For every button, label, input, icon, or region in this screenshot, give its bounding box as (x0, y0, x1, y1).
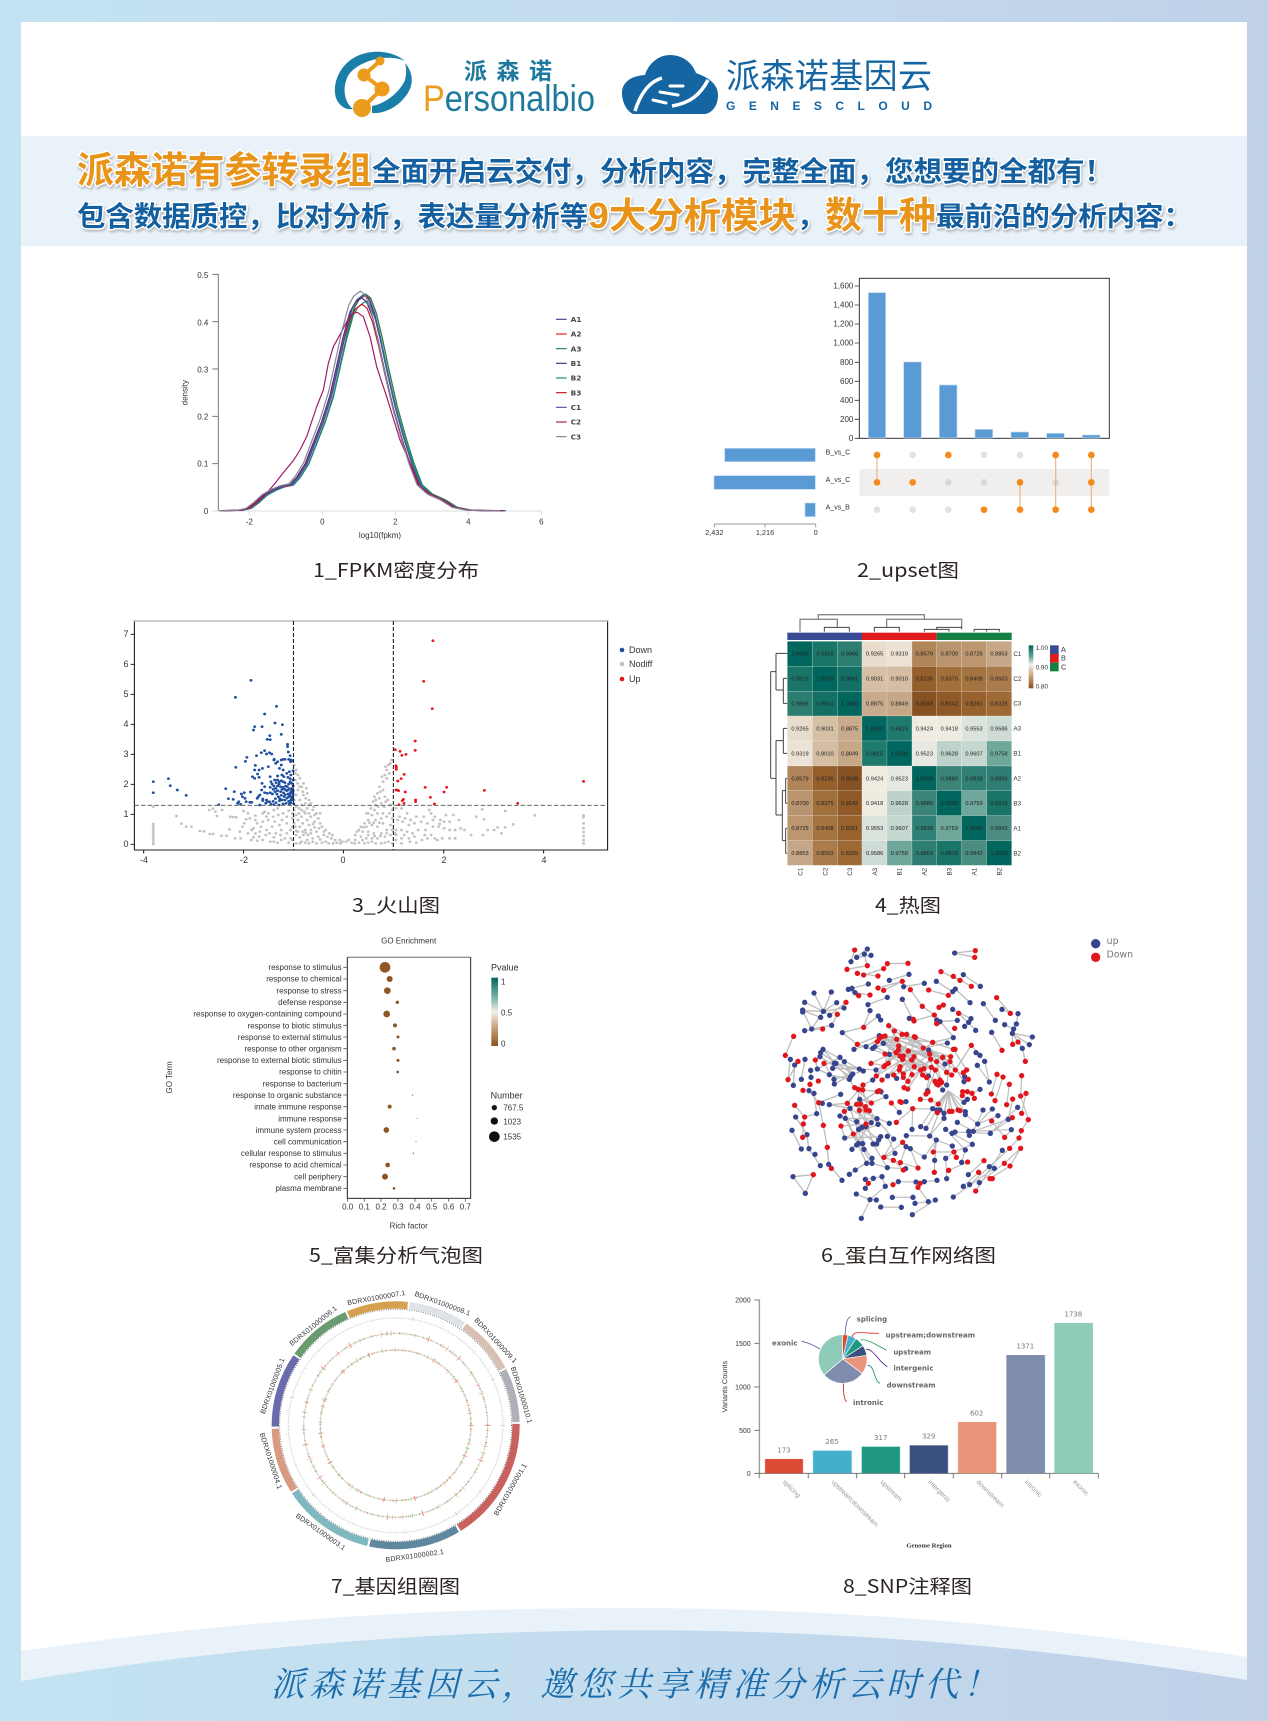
cell values: 0.8142 (941, 701, 958, 707)
chart 1: FPKM density: 0.2 (197, 413, 209, 422)
chart 5: GO enrichment bubble: GO Enrichment (381, 937, 437, 946)
contig labels: BDRX01000008.1 (413, 1291, 471, 1318)
chart 5: GO enrichment bubble: 0.5 (426, 1203, 438, 1212)
caption 4: 4_热图 (875, 891, 941, 918)
cell values: 0.9628 (941, 751, 958, 757)
cell values: 0.9842 (990, 826, 1008, 832)
cell values: 0.8049 (841, 776, 858, 782)
caption 3: 3_火山图 (352, 891, 440, 918)
chart 2: upset plot: 1,000 (833, 339, 854, 348)
cell values: 1.0000 (990, 851, 1008, 857)
cell values: 1.0000 (841, 701, 858, 707)
cell values: 0.9031 (816, 726, 834, 732)
logo: Personalbio (335, 52, 595, 119)
cell values: 0.9607 (965, 751, 983, 757)
chart 5: GO enrichment bubble: 0.0 (342, 1203, 354, 1212)
chart 2: upset plot: 600 (840, 377, 854, 386)
chart 1: FPKM density: log10(fpkm) (359, 531, 401, 540)
chart 1: FPKM density: 0.5 (197, 271, 209, 280)
cell values (791, 652, 1008, 857)
chart 5: GO enrichment bubble: 0.4 (409, 1203, 421, 1212)
GO term labels: response to oxygen-containing compound (193, 1010, 342, 1019)
logo: Personalbio: Personalbio (423, 78, 595, 119)
headline text: 包含数据质控，比对分析，表达量分析等 (77, 201, 588, 232)
footer wave (0, 1608, 1268, 1721)
cell values: 0.9319 (891, 652, 908, 658)
chart 4: heatmap: C3 (847, 867, 854, 876)
cell values: 0.9418 (866, 801, 883, 807)
chart 4: heatmap: C (1061, 662, 1067, 671)
chart 4: heatmap: C1 (797, 867, 804, 876)
legend: C1 (571, 403, 581, 412)
chart 3: volcano plot: 5 (123, 689, 129, 699)
chart 5: GO enrichment bubble: 1 (501, 978, 506, 987)
legend: B1 (571, 359, 581, 368)
chart 2: upset plot: 1,400 (833, 301, 854, 310)
dendrograms (800, 615, 962, 632)
cell values: 0.8261 (841, 826, 858, 832)
chart 3: volcano plot: 2 (441, 855, 447, 865)
chart 8: SNP annotation (720, 1298, 1098, 1550)
cell values: 0.8849 (891, 701, 908, 707)
cell values: 0.9866 (841, 652, 858, 658)
cell values: 0.9553 (965, 726, 983, 732)
chart 5: GO enrichment bubble (165, 937, 524, 1231)
chart 3: volcano plot: Up (629, 674, 641, 684)
chart 4: heatmap: B2 (996, 867, 1003, 876)
down nodes (785, 950, 1028, 1191)
chart 7: genome circos (228, 1258, 563, 1593)
chart 5: GO enrichment bubble: Number (491, 1091, 523, 1101)
chart 4: heatmap: 1.00 (1036, 645, 1048, 652)
chart 4: heatmap: 0.80 (1036, 684, 1048, 691)
cell values: 0.8325 (841, 851, 858, 857)
caption 8: 8_SNP注释图 (843, 1572, 972, 1599)
cell values: 0.8049 (916, 701, 933, 707)
chart 3: volcano plot: 1 (123, 809, 129, 819)
cell values: 0.8849 (841, 751, 858, 757)
cell values: 0.9418 (941, 726, 958, 732)
category labels (781, 1479, 1090, 1529)
chart 5: GO enrichment bubble: Rich factor (390, 1222, 428, 1231)
cell values: 0.8853 (990, 652, 1008, 658)
nodiff points (153, 760, 584, 844)
chart 8: SNP annotation: 0 (747, 1471, 751, 1478)
chart 8: SNP annotation: 500 (739, 1428, 751, 1435)
contig labels: BDRX01000002.1 (385, 1549, 444, 1564)
row and column labels: C3 (1013, 701, 1022, 708)
contig labels: BDRX01000010.1 (509, 1366, 533, 1424)
cell values: 0.9815 (891, 726, 908, 732)
chart 2: upset plot: 800 (840, 358, 854, 367)
intersection matrix (874, 452, 1059, 513)
cell values: 0.9759 (941, 826, 958, 832)
GO term labels: response to chemical (266, 975, 342, 984)
GO term labels: response to stress (276, 986, 342, 995)
contig labels: BDRX01000005.1 (260, 1357, 287, 1415)
bar values (777, 1310, 1082, 1454)
cell values: 0.8853 (791, 851, 809, 857)
chart 3: volcano plot: Down (629, 645, 652, 655)
chart 2: upset plot: 400 (840, 396, 854, 405)
cell values: 0.9265 (866, 652, 883, 658)
pie labels: upstream;downstream (886, 1332, 975, 1340)
contig labels: BDRX01000009.1 (473, 1317, 518, 1365)
cell values: 0.9842 (965, 851, 983, 857)
category labels: intergenic (926, 1479, 952, 1505)
row and column labels: B3 (1013, 800, 1022, 807)
chart 5: GO enrichment bubble: 0.7 (460, 1203, 471, 1212)
cell values: 0.9265 (791, 726, 809, 732)
cell values: 0.8236 (916, 677, 933, 683)
cell values: 0.9010 (891, 677, 908, 683)
chart 4: heatmap: B1 (897, 867, 904, 876)
chart 1: FPKM density: 0.4 (197, 318, 209, 327)
GO term labels: immune system process (256, 1126, 342, 1135)
chart 1: FPKM density (180, 271, 581, 540)
chart 8: SNP annotation: 1500 (735, 1341, 751, 1348)
bar values: 317 (874, 1434, 887, 1442)
chart 3: volcano plot: 4 (541, 855, 547, 865)
chart 4: heatmap: A (1061, 645, 1066, 654)
legend: A3 (571, 344, 581, 353)
nodiff points, dense fill (240, 763, 450, 843)
cell values: 0.8503 (990, 677, 1008, 683)
bar values: 1371 (1016, 1342, 1034, 1350)
cell values: 0.9918 (791, 677, 809, 683)
density curves (219, 291, 506, 511)
chart 5: GO enrichment bubble: 0.6 (443, 1203, 455, 1212)
cell values: 0.8700 (941, 652, 958, 658)
legend: C2 (571, 418, 581, 427)
cell values: 0.8875 (866, 701, 883, 707)
pie labels: intronic (853, 1399, 883, 1407)
chart 3: volcano plot: -2 (240, 855, 248, 865)
cell values: 0.9553 (866, 826, 883, 832)
caption 1: 1_FPKM密度分布 (313, 556, 479, 583)
cell values: 0.9866 (791, 701, 809, 707)
GO term labels: response to biotic stimulus (248, 1021, 342, 1030)
bar values: 602 (970, 1409, 983, 1417)
cell values: 0.9880 (941, 776, 958, 782)
caption 5: 5_富集分析气泡图 (309, 1241, 483, 1268)
contig labels: BDRX01000003.1 (294, 1513, 346, 1552)
headline text: 9大分析模块 (588, 195, 796, 236)
chart 4: heatmap: 0.90 (1036, 664, 1048, 671)
legend (1091, 936, 1133, 962)
cell values: 0.9919 (990, 801, 1008, 807)
GO term labels: response to other organism (244, 1045, 342, 1054)
headline text: 最前沿的分析内容： (936, 202, 1192, 232)
chart 4: heatmap: A1 (971, 867, 978, 876)
up nodes (790, 949, 1032, 1218)
cell values: 0.8408 (816, 826, 834, 832)
cell values: 1.0000 (791, 652, 809, 658)
chart 1: FPKM density: 0 (320, 518, 325, 527)
cell values: 0.8579 (791, 776, 809, 782)
chart 5: GO enrichment bubble: 0.1 (359, 1203, 370, 1212)
GO term labels (193, 963, 342, 1193)
chart 8: SNP annotation: Genome Region (906, 1543, 952, 1550)
cell values: 0.9424 (916, 726, 933, 732)
contig labels (258, 1290, 533, 1564)
cell values: 0.9759 (965, 801, 983, 807)
chart 4: heatmap: B3 (947, 867, 954, 876)
chart 2: upset plot: B_vs_C (826, 450, 850, 457)
row and column labels: A2 (1013, 776, 1022, 783)
cell values: 0.9941 (816, 701, 834, 707)
chart 2: upset plot: 0 (814, 528, 818, 537)
chart 6: protein interaction network (785, 936, 1133, 1218)
variant tracks (288, 1318, 503, 1533)
cell values: 1.0000 (866, 726, 883, 732)
chart 1: FPKM density: 0.1 (197, 460, 209, 469)
footer slogan: 派森诺基因云，邀您共享精准分析云时代！ (271, 1657, 997, 1706)
cell values: 0.9918 (816, 652, 834, 658)
GO term labels: response to acid chemical (249, 1161, 342, 1170)
chart 5: GO enrichment bubble: 1535 (503, 1133, 522, 1142)
chart 2: upset plot: A_vs_B (826, 504, 850, 511)
top bars (714, 293, 1100, 517)
cell values: 0.9424 (866, 776, 883, 782)
chart 5: GO enrichment bubble: 1023 (503, 1117, 522, 1126)
GO term labels: immune response (278, 1114, 342, 1123)
chart 3: volcano plot: 4 (123, 719, 129, 729)
cell values: 0.8875 (841, 726, 858, 732)
legend: Down (1107, 949, 1133, 960)
cell values: 1.0000 (891, 751, 908, 757)
cell values: 0.8375 (816, 801, 834, 807)
cell values: 0.8725 (965, 652, 983, 658)
chart 3: volcano plot: 7 (123, 629, 129, 639)
chart 8: SNP annotation: 1000 (735, 1385, 751, 1392)
chart 1: FPKM density: 0 (204, 507, 209, 516)
chart 4: heatmap: B (1061, 654, 1066, 663)
GO term labels: cell communication (274, 1137, 342, 1146)
GO term labels: response to bacterium (263, 1079, 342, 1088)
chart 2: upset plot: 2,432 (705, 528, 724, 537)
contig labels: BDRX01000004.1 (258, 1432, 283, 1490)
headline text: 派森诺有参转录组 (77, 150, 372, 191)
inset pie (818, 1335, 867, 1383)
chromosome ring (228, 1258, 563, 1593)
headline band (21, 136, 1247, 246)
row and column labels: C1 (1013, 651, 1022, 658)
cell values: 0.9523 (891, 776, 908, 782)
chart 5: GO enrichment bubble: 0.5 (501, 1009, 513, 1018)
heatmap cells (787, 641, 1012, 865)
category labels: splicing (781, 1479, 802, 1500)
pie labels: downstream (887, 1381, 936, 1389)
chart 1: FPKM density: -2 (246, 518, 253, 527)
pie labels (772, 1315, 975, 1407)
chart 5: GO enrichment bubble: 0.2 (375, 1203, 387, 1212)
chart 2: upset plot: 200 (840, 415, 854, 424)
cell values: 0.9586 (866, 851, 883, 857)
GO term labels: innate immune response (254, 1103, 342, 1112)
chart 3: volcano plot: 3 (123, 749, 129, 759)
cell values: 0.8579 (916, 652, 933, 658)
bar values: 329 (922, 1433, 935, 1441)
colour scale and group legend (1029, 645, 1033, 688)
cell values: 1.0000 (965, 826, 983, 832)
chart 5: GO enrichment bubble: GO Term (165, 1061, 174, 1093)
cell values: 0.9031 (866, 677, 883, 683)
caption 6: 6_蛋白互作网络图 (821, 1241, 996, 1268)
row and column labels: A3 (1013, 726, 1022, 733)
chart 2: upset plot: 1,600 (833, 282, 854, 291)
logo: Genescloud (622, 55, 932, 114)
bars (765, 1459, 803, 1473)
cell values: 0.9010 (816, 751, 834, 757)
cell values: 0.9758 (891, 851, 908, 857)
GO term labels: cellular response to stimulus (241, 1149, 342, 1158)
category labels: intronic (1023, 1479, 1044, 1499)
chart 3: volcano plot: 0 (340, 855, 346, 865)
chart 8: SNP annotation: Variants Counts (720, 1361, 729, 1412)
logo: Genescloud: 派森诺基因云 (726, 58, 932, 96)
headline text: 数十种 (825, 195, 936, 236)
row and column labels: C2 (1013, 676, 1022, 683)
cell values: 0.9838 (916, 826, 933, 832)
contig labels: BDRX01000006.1 (289, 1305, 339, 1348)
legend: up (1107, 936, 1119, 947)
cell values: 0.8375 (941, 677, 958, 683)
logo: Personalbio: 派森诺 (464, 58, 552, 84)
pie labels: intergenic (893, 1365, 933, 1373)
cell values: 0.9919 (941, 851, 958, 857)
chart 5: GO enrichment bubble: 767.5 (503, 1104, 524, 1113)
bubbles (380, 962, 459, 1190)
chart 4: heatmap: C2 (822, 867, 829, 876)
cell values: 1.0000 (941, 801, 958, 807)
chart 2: upset plot: 1,216 (756, 528, 774, 537)
row and column labels: B2 (1013, 850, 1022, 857)
pie labels: upstream (893, 1348, 931, 1356)
GO term labels: defense response (278, 998, 342, 1007)
GO term labels: response to chitin (279, 1068, 342, 1077)
cell values: 0.9869 (990, 776, 1008, 782)
network edges (785, 949, 1032, 1193)
GO term labels: response to external biotic stimulus (217, 1056, 342, 1065)
chart 1: FPKM density: 4 (466, 518, 471, 527)
chart 3: volcano plot: 2 (123, 779, 129, 789)
chart 4: heatmap: A2 (922, 867, 929, 876)
caption 7: 7_基因组圈图 (331, 1572, 460, 1599)
cell values: 0.9869 (916, 851, 933, 857)
chart 3: volcano plot: -4 (140, 855, 148, 865)
legend (556, 315, 581, 441)
legend: B3 (571, 388, 581, 397)
chart 2: upset plot: A_vs_C (826, 477, 850, 484)
legend: B2 (571, 374, 581, 383)
cell values: 0.9523 (916, 751, 933, 757)
GO term labels: cell periphery (294, 1172, 342, 1181)
category labels: exonic (1071, 1479, 1090, 1498)
chart 3: volcano plot (123, 621, 653, 865)
cell values: 1.0000 (916, 776, 933, 782)
chart 1: FPKM density: 0.3 (197, 365, 209, 374)
legend: Pvalue (491, 963, 518, 973)
GO term labels: response to organic substance (233, 1091, 342, 1100)
chart 1: FPKM density: 6 (539, 518, 544, 527)
row and column labels: B1 (1013, 751, 1022, 758)
chart 3: volcano plot: 0 (123, 839, 129, 849)
GO term labels: response to external stimulus (238, 1033, 342, 1042)
chart 2: upset plot (705, 278, 1109, 537)
pie labels: exonic (772, 1339, 798, 1347)
category labels: upstream;downstream (830, 1479, 880, 1529)
cell values: 0.9838 (965, 776, 983, 782)
category labels: downstream (975, 1479, 1005, 1510)
headline text: 全面开启云交付，分析内容，完整全面，您想要的全都有！ (372, 156, 1113, 187)
GO term labels: plasma membrane (276, 1184, 342, 1193)
cell values: 0.8725 (791, 826, 809, 832)
chart 5: GO enrichment bubble: 0.3 (392, 1203, 404, 1212)
cell values: 1.0000 (816, 677, 834, 683)
chart 2: upset plot: 0 (849, 434, 854, 443)
chart 3: volcano plot: 6 (123, 659, 129, 669)
row and column labels (1013, 651, 1022, 857)
cell values: 0.9628 (891, 801, 908, 807)
cell values: 0.9880 (916, 801, 933, 807)
chart 4: heatmap: A3 (872, 867, 879, 876)
headline text: ， (797, 201, 825, 232)
legend: A1 (571, 315, 581, 324)
contig labels: BDRX01000007.1 (347, 1290, 406, 1307)
contig labels: BDRX01000001.1 (493, 1463, 529, 1517)
chart 3: volcano plot: Nodiff (629, 659, 653, 669)
GO term labels: response to stimulus (268, 963, 342, 972)
bar values: 265 (825, 1438, 839, 1446)
cell values: 0.9586 (990, 726, 1008, 732)
chart 5: GO enrichment bubble: 0 (501, 1040, 506, 1049)
cell values: 0.8236 (816, 776, 834, 782)
bar values: 1738 (1064, 1310, 1082, 1318)
logo: Genescloud: GENESCLOUD (726, 99, 932, 113)
down points (153, 680, 294, 805)
bar values: 173 (777, 1446, 791, 1454)
caption 2: 2_upset图 (857, 556, 959, 583)
row and column labels: A1 (1013, 825, 1022, 832)
chart 8: SNP annotation: 2000 (735, 1298, 751, 1305)
cell values: 0.9941 (841, 677, 858, 683)
legend: A2 (571, 330, 581, 339)
chart 2: upset plot: 1,200 (833, 320, 854, 329)
up points (395, 641, 584, 805)
cell values: 0.9319 (791, 751, 809, 757)
category labels: upstream (879, 1479, 903, 1504)
chart 1: FPKM density: density (180, 380, 189, 405)
legend: C3 (571, 432, 581, 441)
cell values: 0.9758 (990, 751, 1008, 757)
pie leader lines (802, 1317, 887, 1402)
cell values: 0.8408 (965, 677, 983, 683)
cell values: 0.8325 (990, 701, 1008, 707)
cell values: 0.8503 (816, 851, 834, 857)
chart 4: heatmap (771, 615, 1067, 876)
cell values: 0.8700 (791, 801, 809, 807)
cell values: 0.8261 (965, 701, 983, 707)
chart 1: FPKM density: 2 (393, 518, 398, 527)
headline text (77, 150, 1192, 236)
cell values: 0.9607 (891, 826, 908, 832)
cell values: 0.8142 (841, 801, 858, 807)
pie labels: splicing (857, 1315, 887, 1323)
cell values: 0.9815 (866, 751, 883, 757)
